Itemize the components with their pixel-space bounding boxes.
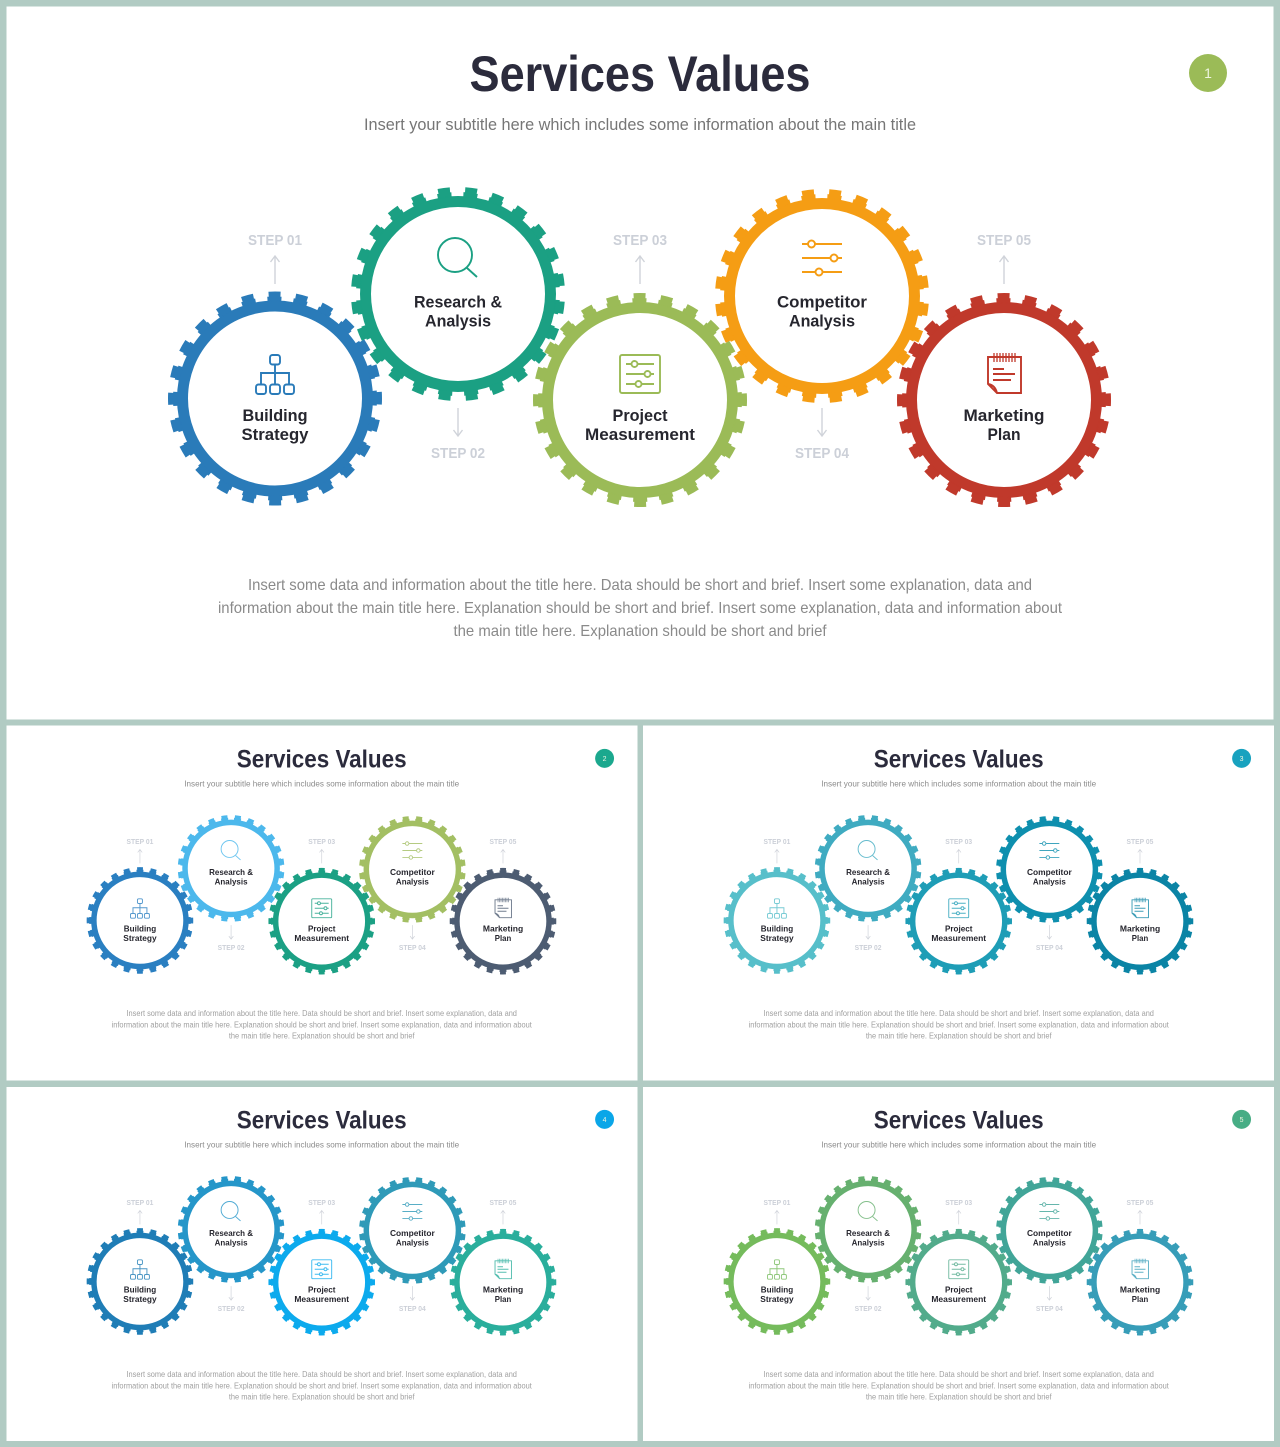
step 03 marker (308, 837, 335, 863)
step 02 marker (218, 1286, 245, 1313)
body text: information about the main title here. Explanation should be short and brief. Insert some explanation, data and information about (112, 1020, 533, 1029)
step 05 marker: STEP 05 (1127, 837, 1153, 846)
icon: magnifier (438, 238, 477, 277)
icon: sliders (802, 240, 842, 276)
gear 2: Research and Analysis (180, 1178, 282, 1280)
body text (749, 1009, 1170, 1041)
step 02 marker (431, 408, 485, 462)
label (1027, 1228, 1072, 1248)
page number badge (1189, 54, 1227, 92)
label: Measurement (931, 933, 986, 943)
gear 5: Marketing Plan (902, 298, 1106, 502)
step 01 marker (248, 232, 302, 284)
label (242, 406, 309, 444)
step 01 marker (764, 1198, 790, 1224)
label: Plan (495, 1294, 511, 1304)
body text (112, 1009, 533, 1041)
step 01 marker: STEP 01 (764, 837, 790, 846)
page number badge: 4 (603, 1117, 607, 1124)
page number badge: 3 (1240, 756, 1244, 763)
icon: notepad (988, 353, 1021, 393)
step 04 marker (399, 1286, 427, 1313)
label: Strategy (123, 933, 157, 943)
icon: org chart (767, 899, 786, 918)
gear 1: Building Strategy (89, 869, 191, 971)
gear 4: Competitor Analysis (361, 818, 463, 920)
label: Research & (846, 867, 890, 877)
label (777, 292, 867, 330)
body text: Insert some data and information about the title here. Data should be short and brief. Insert some explanation, data and (764, 1009, 1154, 1018)
label: Building (124, 924, 156, 934)
label: Marketing (483, 924, 523, 934)
label: Measurement (585, 425, 695, 444)
label (123, 924, 157, 943)
step 01 marker (764, 837, 790, 863)
label (483, 1285, 523, 1304)
title: Services Values (874, 1106, 1044, 1134)
title: Services Values (237, 1106, 407, 1134)
label (1120, 1285, 1160, 1304)
step 05 marker (977, 232, 1031, 284)
body text: information about the main title here. Explanation should be short and brief. Insert some explanation, data and information about (112, 1381, 533, 1390)
label (931, 924, 986, 943)
label: Strategy (760, 933, 794, 943)
body text: Insert some data and information about the title here. Data should be short and brief. Insert some explanation, data and (248, 577, 1032, 594)
step 03 marker: STEP 03 (308, 837, 335, 846)
gear 3: Project Measurement (271, 1231, 373, 1333)
gear 3: Project Measurement (908, 870, 1010, 972)
label: Analysis (1033, 877, 1066, 887)
body text: the main title here. Explanation should be short and brief (454, 623, 827, 640)
label (483, 924, 523, 943)
step 03 marker: STEP 03 (613, 232, 667, 249)
step 05 marker (490, 837, 516, 863)
subtitle: Insert your subtitle here which includes some information about the main title (821, 1140, 1096, 1150)
gear 4: Competitor Analysis (998, 1179, 1100, 1281)
step 05 marker: STEP 05 (490, 1198, 516, 1207)
label (846, 867, 890, 887)
gear 4: Competitor Analysis (998, 818, 1100, 920)
icon: sliders (1039, 842, 1059, 859)
label (294, 924, 349, 943)
step 04 marker: STEP 04 (1036, 1304, 1064, 1313)
label: Research & (414, 292, 502, 312)
body text: the main title here. Explanation should be short and brief (866, 1032, 1052, 1041)
label: Building (124, 1285, 156, 1295)
label: Measurement (294, 1294, 349, 1304)
label: Analysis (425, 312, 491, 330)
step 03 marker (945, 837, 972, 863)
subtitle: Insert your subtitle here which includes some information about the main title (184, 1140, 459, 1150)
label: Analysis (215, 1238, 248, 1248)
step 03 marker (308, 1198, 335, 1224)
body text: Insert some data and information about the title here. Data should be short and brief. Insert some explanation, data and (127, 1009, 517, 1018)
label: Research & (209, 867, 253, 877)
icon: magnifier (221, 1202, 241, 1221)
step 04 marker: STEP 04 (1036, 943, 1064, 952)
label: Competitor (1027, 867, 1072, 877)
step 03 marker (613, 232, 667, 284)
subtitle: Insert your subtitle here which includes some information about the main title (184, 779, 459, 789)
label (414, 292, 502, 330)
label: Project (945, 1285, 973, 1295)
step 02 marker (855, 1286, 882, 1313)
label: Building (761, 924, 793, 934)
body text (218, 577, 1063, 640)
label: Analysis (789, 312, 855, 330)
step 04 marker (399, 925, 427, 952)
page number badge (1232, 1110, 1251, 1129)
label: Plan (988, 425, 1020, 444)
icon: notepad (1132, 898, 1148, 918)
step 02 marker: STEP 02 (431, 445, 485, 462)
label: Plan (1132, 933, 1148, 943)
label (1027, 867, 1072, 887)
gear 1: Building Strategy (172, 296, 378, 501)
icon: magnifier (221, 841, 241, 860)
step 04 marker: STEP 04 (399, 1304, 427, 1313)
body text: Insert some data and information about the title here. Data should be short and brief. Insert some explanation, data and (764, 1370, 1154, 1379)
subtitle: Insert your subtitle here which includes some information about the main title (364, 115, 916, 134)
step 03 marker: STEP 03 (945, 1198, 972, 1207)
body text: information about the main title here. Explanation should be short and brief. Insert some explanation, data and information about (749, 1020, 1170, 1029)
icon: magnifier (858, 1202, 878, 1221)
step 05 marker: STEP 05 (1127, 1198, 1153, 1207)
gear 5: Marketing Plan (1089, 870, 1191, 972)
step 03 marker: STEP 03 (308, 1198, 335, 1207)
label: Project (308, 1285, 336, 1295)
gear 2: Research and Analysis (817, 817, 919, 919)
label (585, 406, 695, 444)
title: Services Values (237, 745, 407, 773)
step 03 marker: STEP 03 (945, 837, 972, 846)
label: Building (761, 1285, 793, 1295)
gear 1: Building Strategy (89, 1230, 191, 1332)
label: Strategy (760, 1294, 794, 1304)
label: Plan (495, 933, 511, 943)
body text (112, 1370, 533, 1402)
icon: checklist sliders (949, 1260, 969, 1279)
label: Strategy (123, 1294, 157, 1304)
icon: org chart (256, 355, 294, 394)
page number badge: 1 (1204, 65, 1212, 81)
label (1120, 924, 1160, 943)
step 02 marker (218, 925, 245, 952)
icon: checklist sliders (312, 1260, 332, 1279)
step 04 marker (1036, 925, 1064, 952)
gear 4: Competitor Analysis (361, 1179, 463, 1281)
gear 3: Project Measurement (908, 1231, 1010, 1333)
label: Project (612, 406, 668, 425)
step 03 marker (945, 1198, 972, 1224)
label: Marketing (1120, 1285, 1160, 1295)
label: Marketing (483, 1285, 523, 1295)
label: Analysis (396, 877, 429, 887)
icon: org chart (130, 1260, 149, 1279)
panel: slide 4 (89, 1106, 614, 1402)
label: Measurement (294, 933, 349, 943)
step 01 marker (127, 1198, 153, 1224)
step 01 marker: STEP 01 (127, 837, 153, 846)
label: Research & (846, 1228, 890, 1238)
label: Project (945, 924, 973, 934)
step 02 marker (855, 925, 882, 952)
panel: slide 5 (726, 1106, 1251, 1402)
body text: the main title here. Explanation should be short and brief (229, 1032, 415, 1041)
gear 2: Research and Analysis (180, 817, 282, 919)
step 01 marker: STEP 01 (764, 1198, 790, 1207)
page number badge: 5 (1240, 1117, 1244, 1124)
page number badge (595, 749, 614, 768)
step 02 marker: STEP 02 (218, 1304, 245, 1313)
step 04 marker (1036, 1286, 1064, 1313)
step 01 marker: STEP 01 (248, 232, 302, 249)
label (846, 1228, 890, 1248)
icon: sliders (402, 842, 422, 859)
icon: notepad (1132, 1259, 1148, 1279)
step 05 marker: STEP 05 (977, 232, 1031, 249)
label: Plan (1132, 1294, 1148, 1304)
step 05 marker (1127, 837, 1153, 863)
label: Competitor (777, 292, 867, 312)
gear 2: Research and Analysis (356, 192, 560, 396)
step 01 marker (127, 837, 153, 863)
body text: information about the main title here. Explanation should be short and brief. Insert some explanation, data and information about (749, 1381, 1170, 1390)
page number badge: 2 (603, 756, 607, 763)
gear 1: Building Strategy (726, 1230, 828, 1332)
gear 5: Marketing Plan (452, 870, 554, 972)
label: Competitor (390, 1228, 435, 1238)
label (390, 1228, 435, 1248)
step 05 marker (1127, 1198, 1153, 1224)
step 04 marker (795, 408, 850, 462)
gear 1: Building Strategy (726, 869, 828, 971)
label: Analysis (396, 1238, 429, 1248)
gear 5: Marketing Plan (1089, 1231, 1191, 1333)
label (294, 1285, 349, 1304)
icon: checklist sliders (949, 899, 969, 918)
label (209, 867, 253, 887)
panel: slide 3 (726, 745, 1251, 1041)
body text: information about the main title here. Explanation should be short and brief. Insert some explanation, data and information about (218, 600, 1063, 617)
label: Building (242, 406, 308, 425)
label (760, 1285, 794, 1304)
icon: sliders (402, 1203, 422, 1220)
body text: the main title here. Explanation should be short and brief (866, 1393, 1052, 1402)
step 04 marker: STEP 04 (399, 943, 427, 952)
label (760, 924, 794, 943)
subtitle: Insert your subtitle here which includes some information about the main title (821, 779, 1096, 789)
label (390, 867, 435, 887)
body text: Insert some data and information about the title here. Data should be short and brief. Insert some explanation, data and (127, 1370, 517, 1379)
step 02 marker: STEP 02 (218, 943, 245, 952)
title: Services Values (874, 745, 1044, 773)
icon: sliders (1039, 1203, 1059, 1220)
step 05 marker (490, 1198, 516, 1224)
icon: org chart (767, 1260, 786, 1279)
icon: checklist sliders (312, 899, 332, 918)
label: Measurement (931, 1294, 986, 1304)
page number badge (595, 1110, 614, 1129)
gear 2: Research and Analysis (817, 1178, 919, 1280)
step 02 marker: STEP 02 (855, 1304, 882, 1313)
gear 3: Project Measurement (271, 870, 373, 972)
label: Competitor (390, 867, 435, 877)
icon: magnifier (858, 841, 878, 860)
label: Competitor (1027, 1228, 1072, 1238)
body text: the main title here. Explanation should be short and brief (229, 1393, 415, 1402)
label (209, 1228, 253, 1248)
step 05 marker: STEP 05 (490, 837, 516, 846)
icon: notepad (495, 898, 511, 918)
step 04 marker: STEP 04 (795, 445, 850, 462)
icon: checklist sliders (620, 355, 660, 393)
body text (749, 1370, 1170, 1402)
panel: slide 2 (89, 745, 614, 1041)
icon: notepad (495, 1259, 511, 1279)
label: Strategy (242, 425, 309, 444)
page number badge (1232, 749, 1251, 768)
step 02 marker: STEP 02 (855, 943, 882, 952)
icon: org chart (130, 899, 149, 918)
title: Services Values (470, 46, 810, 102)
step 01 marker: STEP 01 (127, 1198, 153, 1207)
label: Project (308, 924, 336, 934)
label (964, 406, 1044, 444)
gear 4: Competitor Analysis (720, 194, 924, 398)
label: Analysis (852, 1238, 885, 1248)
label: Research & (209, 1228, 253, 1238)
panel: main slide 1 (172, 46, 1227, 640)
gear 3: Project Measurement (538, 298, 742, 502)
label: Analysis (852, 877, 885, 887)
gear 5: Marketing Plan (452, 1231, 554, 1333)
label (123, 1285, 157, 1304)
label: Marketing (964, 406, 1044, 425)
label (931, 1285, 986, 1304)
label: Analysis (215, 877, 248, 887)
label: Marketing (1120, 924, 1160, 934)
label: Analysis (1033, 1238, 1066, 1248)
